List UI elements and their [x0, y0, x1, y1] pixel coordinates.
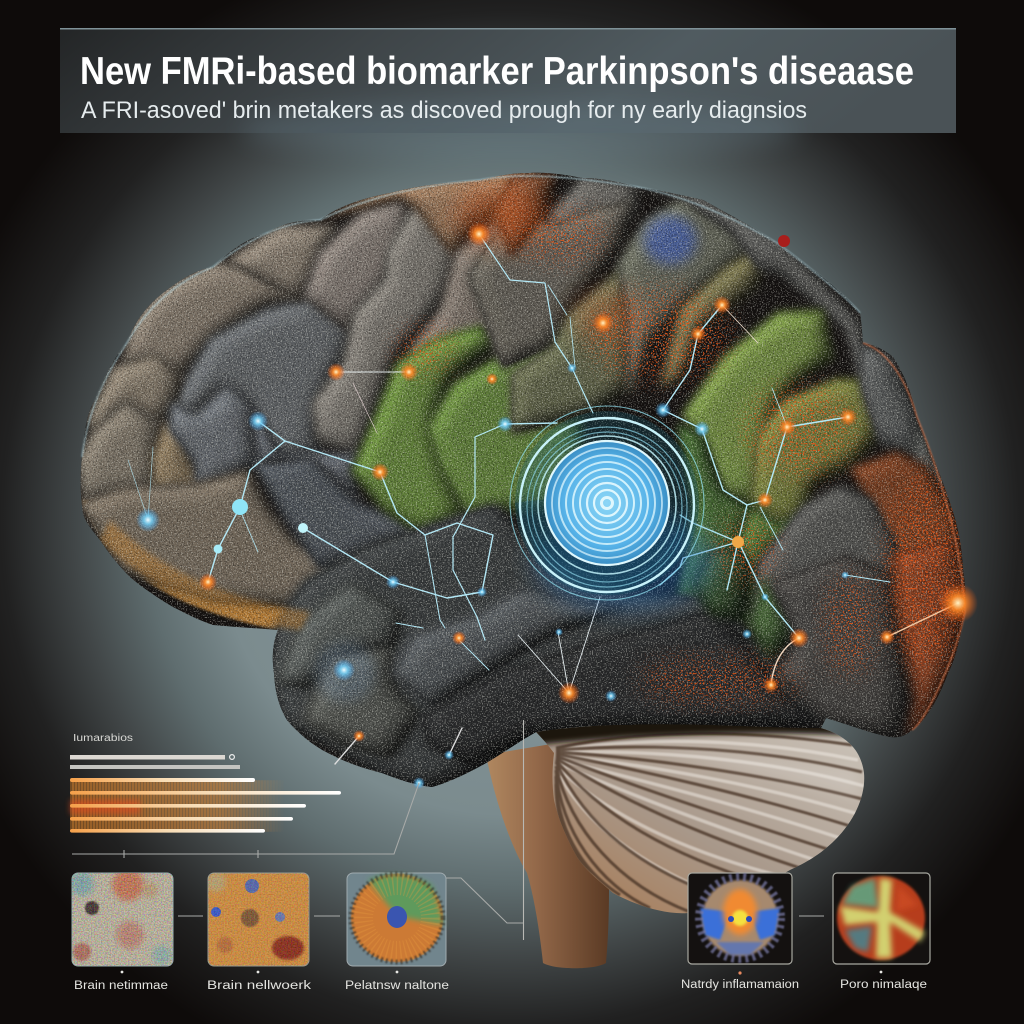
thumbnail: neural inflammation: [681, 873, 799, 991]
grey frontal gyrus: [755, 485, 898, 628]
rim bottom-left tan fold: [82, 500, 300, 632]
caption: Natrdy inflamamaion: [681, 979, 799, 991]
thumbnail: brain network: [206, 872, 311, 992]
cerebellum: [536, 724, 864, 914]
right lobe gyri: [467, 173, 968, 628]
neural network lines: [128, 234, 958, 764]
subtitle: A FRI-asoved' brin metakers as discoved prough for ny early diagnsios: [81, 97, 807, 124]
dark green lower gyri: [690, 547, 754, 620]
caption: Pelatnsw naltone: [345, 980, 449, 992]
gyrus: middle grey: [172, 298, 352, 462]
gyrus: top left: [122, 262, 302, 378]
green gyrus 1: [352, 325, 497, 537]
left lobe gyri: [77, 167, 583, 610]
caption: Brain nellwoerk: [207, 980, 311, 992]
chart heading: Iumarabios: [73, 733, 133, 744]
thumbnail: pore imaging: [833, 873, 930, 991]
stipple texture: [70, 165, 980, 795]
rim light: [82, 176, 965, 730]
tinted patches: [644, 216, 696, 264]
caption: Poro nimalaqe: [840, 979, 927, 991]
temporal base: [269, 503, 826, 790]
gyrus: upper: [227, 225, 337, 302]
gyrus: dark lower: [252, 457, 423, 570]
rust frontal gyrus: [850, 452, 968, 627]
title panel: [60, 28, 956, 158]
gyrus: far left: [87, 353, 182, 437]
central concentric fMRI biomarker: [510, 406, 715, 610]
thumbnail: Parkinson pattern: [345, 873, 449, 992]
thumbnail: brain response: [70, 869, 173, 992]
grey outer strip: [860, 343, 922, 462]
bars: [70, 755, 341, 833]
right lower frontal: [769, 553, 908, 740]
outer top grey gyrus: [644, 188, 864, 377]
data nodes: [136, 222, 978, 789]
connector lines: [72, 720, 824, 940]
caption ticks: [121, 971, 882, 975]
green gyrus: large: [682, 310, 833, 507]
title: New FMRi-based biomarker Parkinpson's diseaase: [80, 50, 914, 93]
temporal lobe & lower gyri: [269, 503, 971, 790]
brain stem: [486, 740, 609, 968]
gyrus: lower left tan: [78, 470, 347, 610]
brain: [70, 165, 980, 795]
bar chart: biomarkers: [70, 733, 341, 833]
caption: Brain netimmae: [74, 980, 168, 992]
orange speckle: [397, 209, 965, 702]
green gyrus 2: [427, 348, 583, 520]
